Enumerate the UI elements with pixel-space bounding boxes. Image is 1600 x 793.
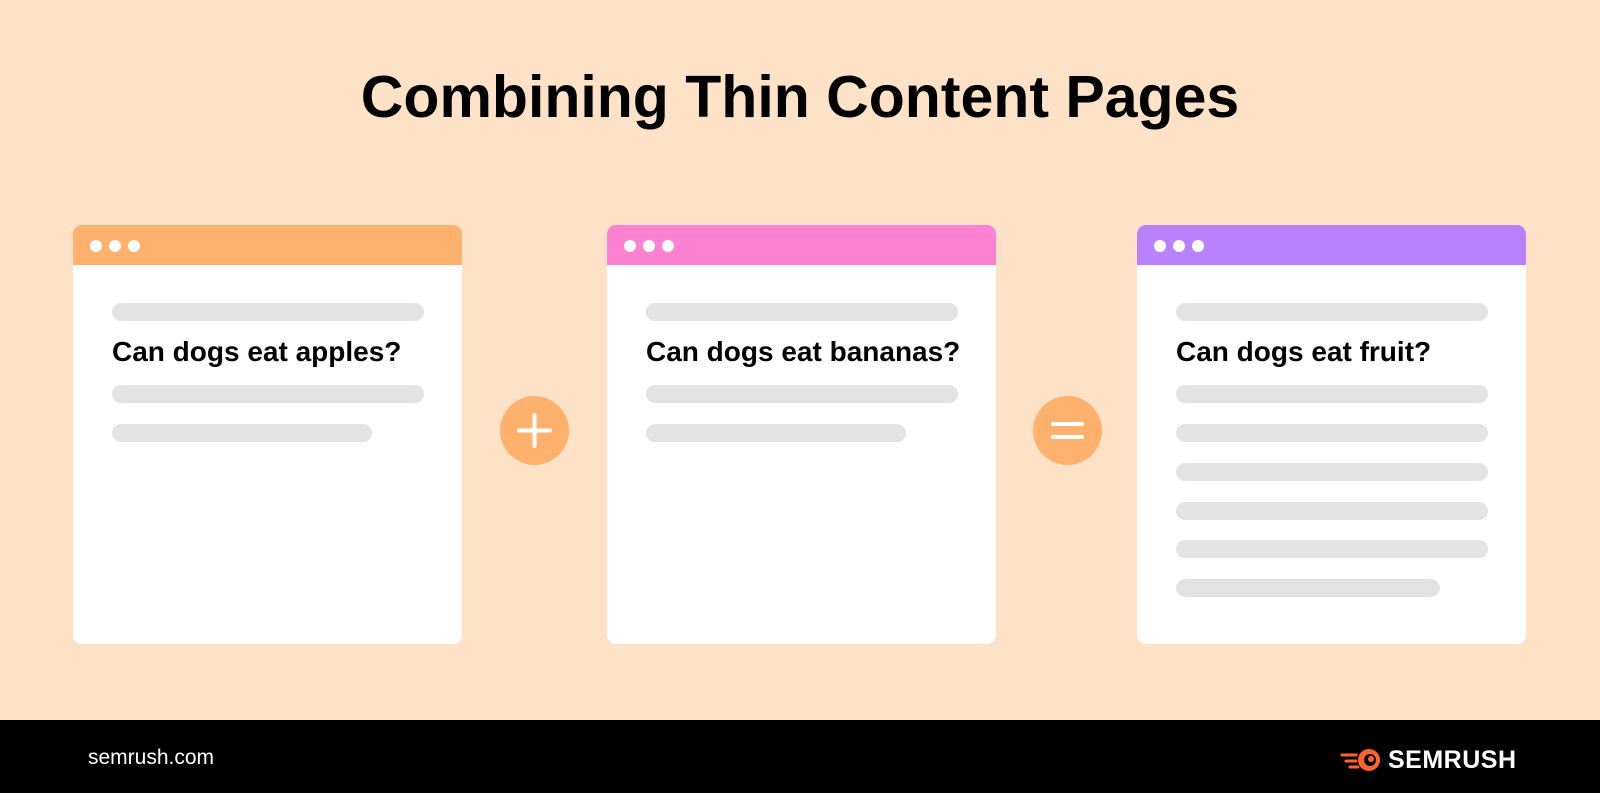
footer url: semrush.com [88,746,214,769]
title: Combining Thin Content Pages [361,64,1239,130]
header bar purple [1137,225,1526,265]
panel: fruit page [1137,225,1526,644]
icon: plus [500,396,569,465]
header bar orange [73,225,462,265]
panel: bananas page [607,225,996,644]
logo: semrush: SEMRUSH [1388,746,1517,774]
icon: equals [1033,396,1102,465]
heading bananas: Can dogs eat bananas? [646,336,960,367]
header bar pink [607,225,996,265]
heading fruit: Can dogs eat fruit? [1176,336,1431,367]
panel: apples page [73,225,462,644]
footer [0,720,1600,793]
heading apples: Can dogs eat apples? [112,336,401,367]
